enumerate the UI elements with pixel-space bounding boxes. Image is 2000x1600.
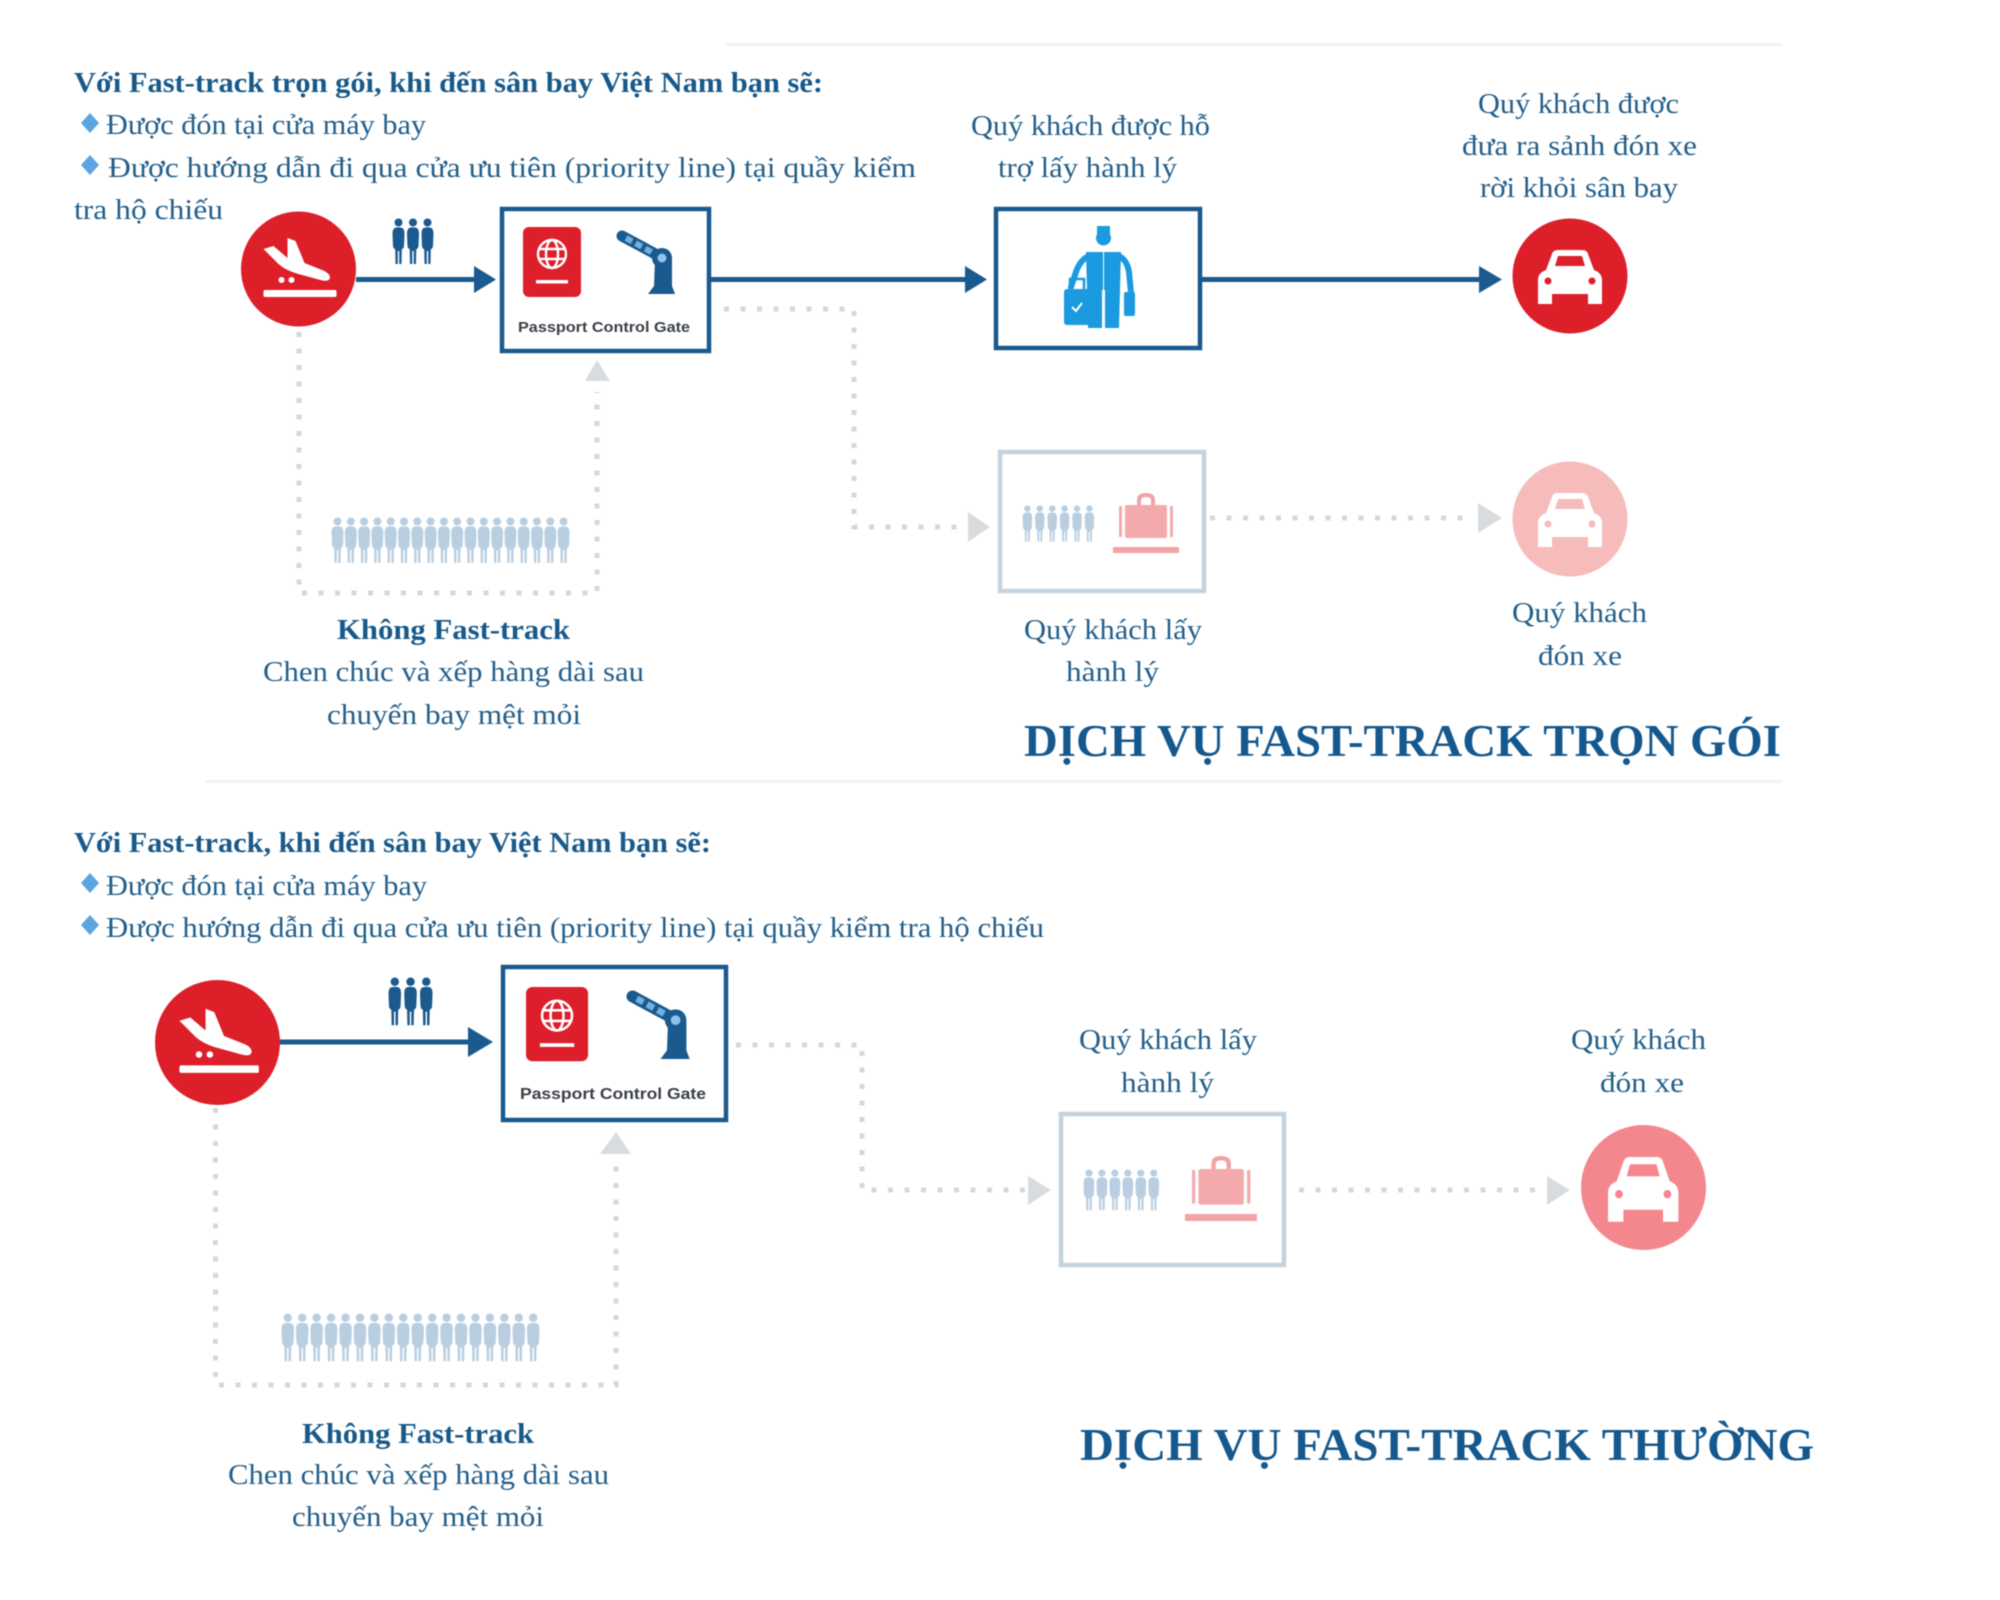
middle divider bbox=[205, 780, 1782, 783]
intro text block: Với Fast-track trọn gói, khi đến sân bay Việt Nam bạn sẽ: bbox=[74, 67, 823, 99]
intro text block bbox=[74, 67, 916, 226]
people: fast-track group bbox=[388, 978, 433, 1025]
dotted arrow: baggage to car (faded) bbox=[1299, 1176, 1570, 1205]
box: passport control gate: Passport Control Gate bbox=[518, 319, 690, 336]
label: collect baggage bbox=[1024, 614, 1203, 688]
label: escorted to pickup bbox=[1462, 88, 1697, 204]
icon: car (faded red) bbox=[1581, 1125, 1706, 1250]
intro text block: tra hộ chiếu bbox=[74, 194, 223, 226]
box: passport control gate: Passport Control Gate bbox=[520, 1086, 706, 1103]
box: baggage queue (faded) bbox=[1000, 452, 1204, 591]
label: baggage assistance: Quý khách được hỗ bbox=[971, 110, 1210, 142]
label: no fast-track: chuyến bay mệt mỏi bbox=[292, 1501, 544, 1533]
icon: car bbox=[1512, 218, 1628, 334]
label: pick up car bbox=[1571, 1024, 1707, 1099]
people queue: long line bbox=[281, 1314, 540, 1361]
icon: landing plane bbox=[155, 980, 280, 1105]
box: baggage queue (faded) bbox=[1061, 1114, 1284, 1265]
label: no fast-track: Không Fast-track bbox=[302, 1418, 535, 1450]
intro text block: Được đón tại cửa máy bay bbox=[106, 870, 428, 902]
label: pick up car: Quý khách bbox=[1571, 1024, 1707, 1056]
label: escorted to pickup: rời khỏi sân bay bbox=[1480, 172, 1679, 204]
label: pick up car: Quý khách bbox=[1512, 597, 1648, 629]
top divider bbox=[726, 43, 1782, 46]
arrowhead: queue into passport gate bbox=[600, 1132, 631, 1154]
label: pick up car bbox=[1512, 597, 1648, 672]
dotted path: passport gate to baggage queue bbox=[736, 1045, 1026, 1190]
people: fast-track group bbox=[392, 218, 434, 264]
intro text block: Được đón tại cửa máy bay bbox=[106, 109, 427, 141]
intro text block bbox=[74, 827, 1044, 944]
title: standard: DỊCH VỤ FAST-TRACK THƯỜNG bbox=[1080, 1419, 1814, 1470]
label: collect baggage: Quý khách lấy bbox=[1079, 1024, 1258, 1056]
box: passport control gate bbox=[502, 209, 709, 351]
label: collect baggage bbox=[1079, 1024, 1258, 1099]
arrow: plane to passport gate bbox=[356, 266, 496, 293]
arrow: gate to baggage assistance bbox=[711, 266, 987, 293]
label: collect baggage: hành lý bbox=[1066, 656, 1160, 688]
dotted path: without fast-track queue bbox=[299, 332, 597, 593]
intro text block: Được hướng dẫn đi qua cửa ưu tiên (priority line) tại quầy kiểm bbox=[108, 152, 916, 184]
dotted arrow: baggage to car (faded) bbox=[1210, 503, 1502, 533]
label: baggage assistance bbox=[971, 110, 1210, 184]
panel: full-package fast-track bbox=[74, 67, 1781, 766]
arrowhead: to baggage queue bbox=[968, 512, 990, 542]
panel: standard fast-track bbox=[74, 827, 1814, 1533]
intro text block: Được hướng dẫn đi qua cửa ưu tiên (priority line) tại quầy kiểm tra hộ chiếu bbox=[106, 912, 1044, 944]
arrowhead: to baggage queue bbox=[1028, 1176, 1051, 1205]
label: no fast-track bbox=[263, 614, 644, 731]
label: collect baggage: Quý khách lấy bbox=[1024, 614, 1203, 646]
arrowhead: queue into passport gate bbox=[585, 360, 610, 381]
label: pick up car: đón xe bbox=[1600, 1067, 1684, 1099]
label: no fast-track: Không Fast-track bbox=[337, 614, 571, 646]
arrow: baggage to car bbox=[1202, 266, 1502, 293]
label: collect baggage: hành lý bbox=[1121, 1067, 1215, 1099]
intro text block: Với Fast-track, khi đến sân bay Việt Nam bạn sẽ: bbox=[74, 827, 711, 859]
label: escorted to pickup: đưa ra sảnh đón xe bbox=[1462, 130, 1697, 162]
label: pick up car: đón xe bbox=[1538, 640, 1622, 672]
dotted path: passport gate to baggage queue bbox=[724, 309, 964, 527]
label: baggage assistance: trợ lấy hành lý bbox=[998, 152, 1178, 184]
label: no fast-track: chuyến bay mệt mỏi bbox=[327, 699, 581, 731]
icon: car (faded) bbox=[1512, 462, 1628, 576]
label: escorted to pickup: Quý khách được bbox=[1478, 88, 1679, 120]
people queue: long line bbox=[332, 518, 570, 563]
box: bellhop assistance bbox=[996, 209, 1200, 348]
box: passport control gate bbox=[503, 967, 726, 1120]
label: no fast-track: Chen chúc và xếp hàng dài sau bbox=[228, 1459, 609, 1491]
icon: landing plane bbox=[241, 212, 356, 326]
dotted path: without fast-track queue bbox=[216, 1108, 616, 1385]
arrow: plane to passport gate bbox=[280, 1027, 493, 1057]
title: full package: DỊCH VỤ FAST-TRACK TRỌN GÓI bbox=[1024, 715, 1781, 766]
label: no fast-track: Chen chúc và xếp hàng dài sau bbox=[263, 656, 644, 688]
label: no fast-track bbox=[228, 1418, 609, 1533]
